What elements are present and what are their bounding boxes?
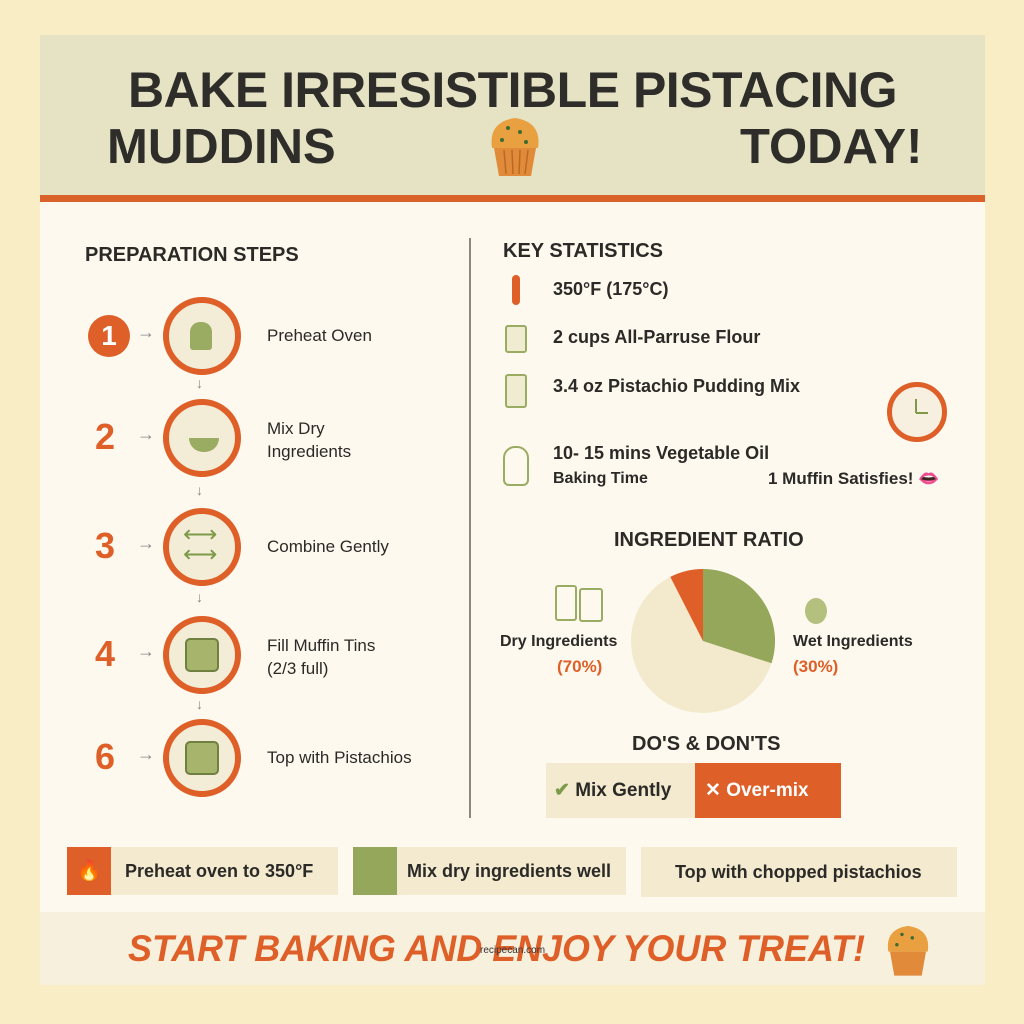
- stat flour: [505, 325, 760, 353]
- header banner: [40, 35, 985, 202]
- step 6: Top with Pistachios: [267, 748, 412, 767]
- ingredient ratio: [500, 529, 913, 713]
- step 1: →: [137, 322, 155, 342]
- down arrows: ↓: [196, 696, 203, 712]
- tip: preheat: [67, 847, 338, 895]
- tip: mix: [353, 847, 626, 895]
- wet label: (30%): [793, 657, 838, 676]
- step 3: →: [137, 533, 155, 553]
- heading: PREPARATION STEPS: [85, 244, 299, 266]
- step 4: (2/3 full): [267, 659, 328, 678]
- step 3: ⟷: [183, 541, 217, 568]
- down arrows: ↓: [196, 375, 203, 391]
- step 6: 6: [95, 736, 115, 777]
- wet label: [793, 598, 913, 676]
- do: [546, 763, 695, 818]
- stat oil and time: [503, 443, 769, 487]
- step 2: 2: [95, 416, 115, 457]
- step 4: →: [137, 641, 155, 661]
- step 3: [95, 508, 389, 586]
- icon: clock: [887, 382, 947, 442]
- step 1: Preheat Oven: [267, 326, 372, 345]
- heading: DO'S & DON'TS: [632, 733, 780, 755]
- tip: top: [641, 847, 957, 897]
- step 6: [95, 719, 412, 797]
- wet label: Wet Ingredients: [793, 633, 913, 650]
- stat flour: 2 cups All-Parruse Flour: [553, 327, 760, 347]
- heading: KEY STATISTICS: [503, 240, 663, 262]
- stat temperature: 350°F (175°C): [553, 279, 668, 299]
- step 3: 3: [95, 525, 115, 566]
- do: ✔ Mix Gently: [554, 780, 671, 801]
- watermark: recipecan.com: [480, 945, 545, 956]
- dont: ✕ Over-mix: [705, 780, 809, 801]
- panel: preparation steps: [85, 244, 412, 797]
- divider: [469, 238, 471, 818]
- step 3: ⟷: [183, 521, 217, 548]
- step 2: →: [137, 424, 155, 444]
- footer banner: [40, 912, 985, 985]
- stat pudding: [505, 374, 800, 408]
- icon: muffin: [888, 926, 928, 976]
- step 2: Ingredients: [267, 442, 351, 461]
- tip: mix: Mix dry ingredients well: [407, 861, 611, 881]
- tip: preheat: 🔥: [77, 860, 101, 882]
- step 1: 1: [101, 320, 117, 351]
- step 4: [95, 616, 375, 694]
- down arrows: ↓: [196, 589, 203, 605]
- step 3: Combine Gently: [267, 537, 389, 556]
- icon: muffin: [492, 118, 538, 176]
- pie chart: [631, 569, 775, 713]
- tip: preheat: Preheat oven to 350°F: [125, 861, 313, 881]
- satisfaction note: 1 Muffin Satisfies! 👄: [768, 469, 939, 488]
- tip: top: Top with chopped pistachios: [675, 862, 922, 882]
- stat oil and time: 10- 15 mins Vegetable Oil: [553, 443, 769, 463]
- dry label: Dry Ingredients: [500, 633, 617, 650]
- do's and don'ts: [546, 733, 841, 818]
- step 6: →: [137, 744, 155, 764]
- step 2: Mix Dry: [267, 419, 325, 438]
- step 2: [95, 399, 351, 477]
- dry label: [500, 585, 617, 676]
- panel: key statistics: [503, 240, 947, 488]
- header banner: TODAY!: [740, 120, 922, 174]
- down arrows: [196, 375, 203, 712]
- header banner: MUDDINS: [107, 120, 336, 174]
- down arrows: ↓: [196, 482, 203, 498]
- stat pudding: 3.4 oz Pistachio Pudding Mix: [553, 376, 800, 396]
- stat oil and time: Baking Time: [553, 470, 648, 487]
- step 1: [88, 297, 372, 375]
- step 4: Fill Muffin Tins: [267, 636, 375, 655]
- call to action: START BAKING AND ENJOY YOUR TREAT!: [128, 928, 865, 969]
- step 4: 4: [95, 633, 115, 674]
- stat temperature: [512, 275, 668, 305]
- dont: [695, 763, 841, 818]
- title: BAKE IRRESISTIBLE PISTACING: [128, 62, 897, 118]
- heading: INGREDIENT RATIO: [614, 529, 804, 551]
- dry label: (70%): [557, 657, 602, 676]
